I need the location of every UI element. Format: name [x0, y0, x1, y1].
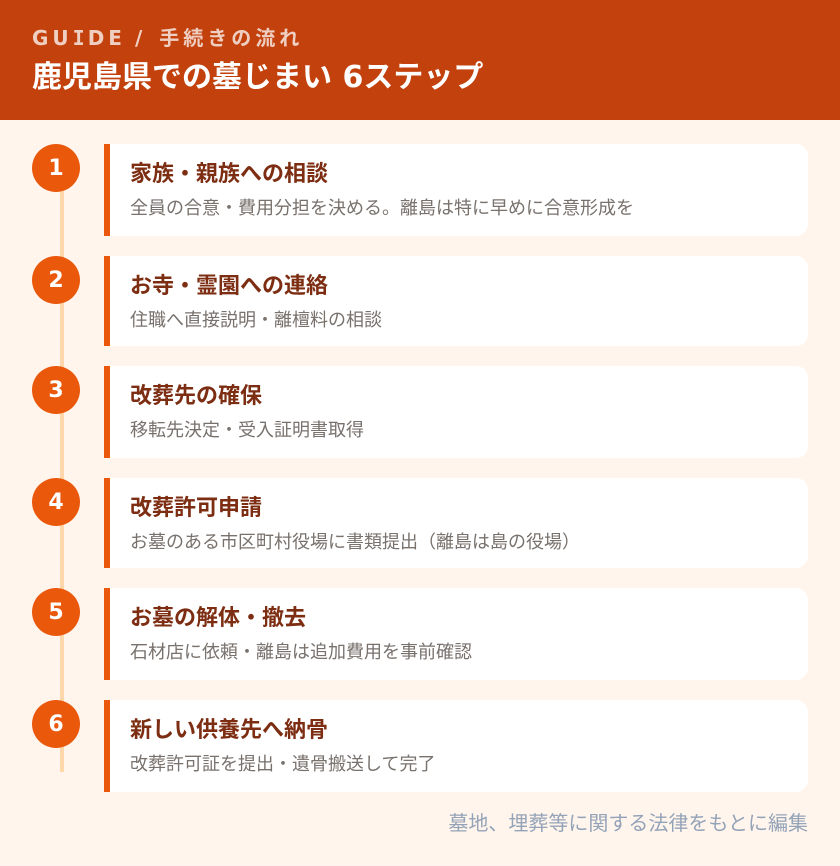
title: 鹿児島県での墓じまい 6ステップ: [32, 52, 483, 96]
timeline line: [60, 168, 64, 772]
step 4 card: お墓のある市区町村役場に書類提出（離島は島の役場）: [130, 528, 580, 554]
eyebrow label: GUIDE / 手続きの流れ: [32, 22, 303, 51]
step 2 number: 2: [48, 268, 64, 293]
step 5 card: お墓の解体・撤去: [130, 600, 306, 632]
step 3 card: [104, 366, 808, 458]
step 1 card: [104, 144, 808, 236]
step 1 number: [32, 144, 80, 192]
step 5 card: [104, 588, 808, 680]
step 2 card: お寺・霊園への連絡: [130, 268, 328, 300]
step 4 number: [32, 478, 80, 526]
step 3 card: 改葬先の確保: [130, 378, 262, 410]
step 6 number: [32, 700, 80, 748]
header band: [0, 0, 840, 120]
source note: 墓地、埋葬等に関する法律をもとに編集: [448, 807, 808, 836]
step 5 number: [32, 588, 80, 636]
step 3 number: [32, 366, 80, 414]
step 5 card: 石材店に依頼・離島は追加費用を事前確認: [130, 638, 472, 664]
step 1 number: 1: [48, 156, 64, 181]
step 4 card: 改葬許可申請: [130, 490, 262, 522]
step 6 number: 6: [48, 712, 64, 737]
step 5 number: 5: [48, 600, 64, 625]
step 4 card: [104, 478, 808, 568]
step 4 number: 4: [48, 490, 64, 515]
step 3 card: 移転先決定・受入証明書取得: [130, 416, 364, 442]
step 6 card: 新しい供養先へ納骨: [130, 712, 328, 744]
step 3 number: 3: [48, 378, 64, 403]
step 6 card: 改葬許可証を提出・遺骨搬送して完了: [130, 750, 435, 776]
step 2 number: [32, 256, 80, 304]
step 6 card: [104, 700, 808, 792]
step 2 card: [104, 256, 808, 346]
step 1 card: 全員の合意・費用分担を決める。離島は特に早めに合意形成を: [130, 194, 634, 220]
step 1 card: 家族・親族への相談: [130, 156, 328, 188]
step 2 card: 住職へ直接説明・離檀料の相談: [130, 306, 382, 332]
